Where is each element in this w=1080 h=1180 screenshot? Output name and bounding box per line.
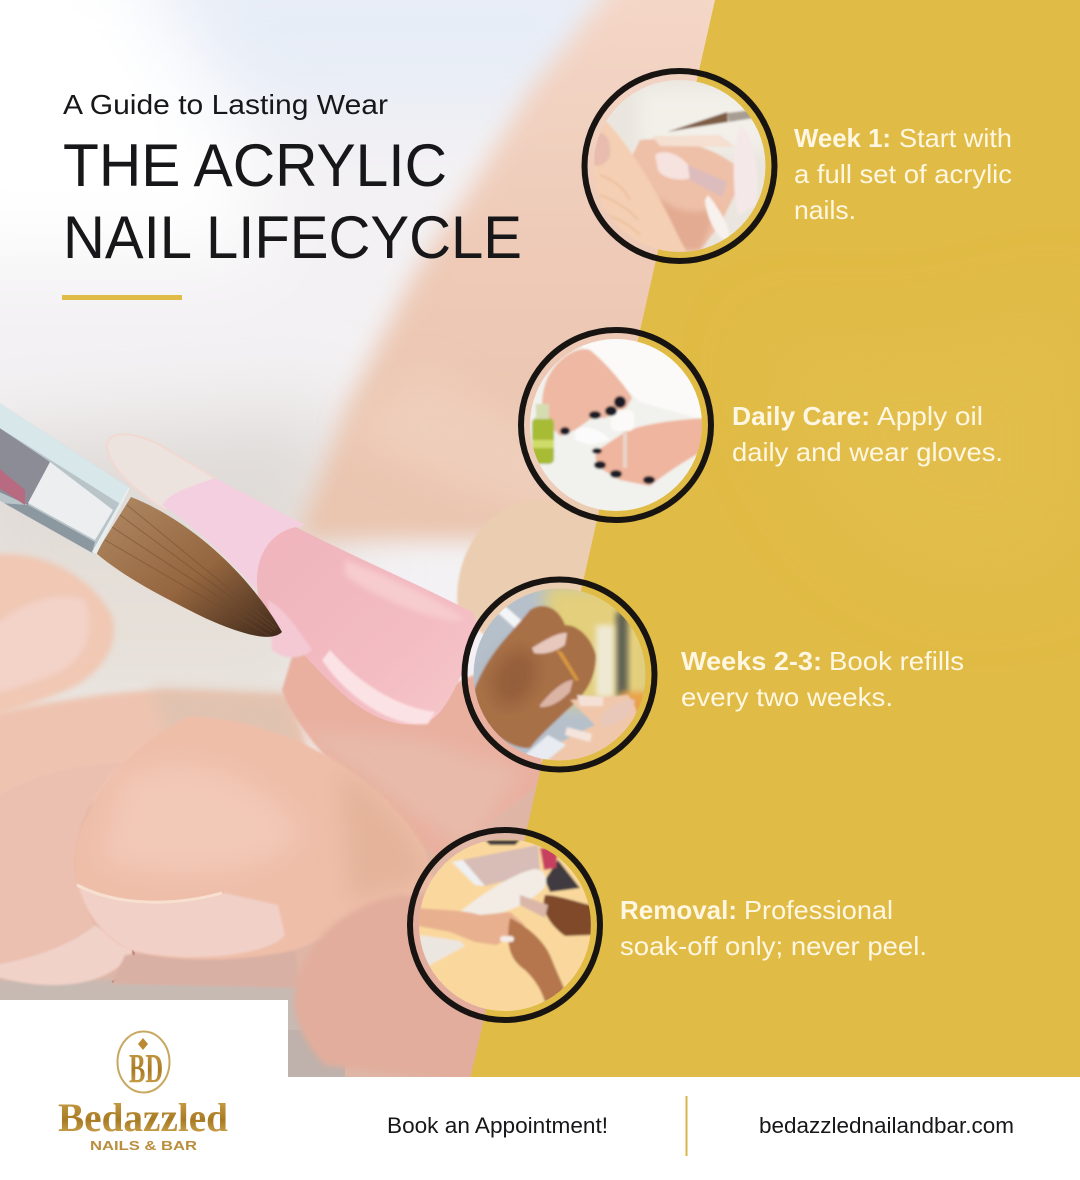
photo: nail tip and brush [590, 76, 770, 256]
logo emblem [118, 1032, 170, 1092]
gold diagonal panel [470, 0, 1080, 1080]
brush bristles [96, 497, 282, 637]
subtitle: A Guide to Lasting Wear [63, 89, 388, 120]
second finger [0, 690, 320, 810]
photo: professional soak-off [415, 835, 595, 1015]
photo: cuticle oil dropper [528, 336, 705, 516]
left lower finger [0, 806, 296, 988]
title [63, 132, 522, 271]
title underline [62, 295, 182, 300]
knuckle finger [74, 716, 435, 960]
ring [521, 330, 711, 520]
call to action: Book an Appointment! [387, 1113, 608, 1138]
caption: every two weeks. [681, 682, 893, 712]
caption: daily and wear gloves. [732, 437, 1003, 467]
title: NAIL LIFECYCLE [63, 204, 522, 271]
caption: nails. [794, 195, 856, 225]
lower background [0, 784, 537, 1077]
left finger with soft nail [0, 554, 114, 716]
nail finger skin [281, 654, 543, 855]
logo emblem: BD [129, 1045, 163, 1091]
background photo: acrylic nail application [0, 0, 715, 1077]
website: bedazzlednailandbar.com [759, 1113, 1014, 1138]
step 4: removal [410, 830, 927, 1020]
title: THE ACRYLIC [63, 132, 447, 199]
brush ferrule [0, 400, 132, 556]
caption: soak-off only; never peel. [620, 931, 927, 961]
ring [464, 580, 654, 770]
caption: Book refills [829, 646, 964, 676]
caption: Removal: [620, 895, 737, 925]
caption: Week 1: [794, 123, 891, 153]
caption: Start with [899, 123, 1012, 153]
step 3: weeks 2-3 [464, 580, 971, 770]
logo wordmark: Bedazzled [58, 1095, 228, 1140]
step 2: daily care [521, 330, 1003, 520]
heading block [62, 89, 522, 300]
logo: Bedazzled Nails & Bar [0, 1000, 288, 1180]
caption: Professional [744, 895, 893, 925]
pink acrylic nail [162, 478, 478, 724]
ring [410, 830, 600, 1020]
thumb behind the nail [456, 527, 595, 636]
footer divider [686, 1096, 688, 1156]
brush [0, 400, 282, 637]
logo tagline: NAILS & BAR [90, 1138, 198, 1153]
photo: technician hand refilling nail [474, 588, 646, 760]
wet acrylic bead [268, 600, 312, 658]
footer bar [0, 1077, 1080, 1180]
caption: Daily Care: [732, 401, 870, 431]
clear nail tip [107, 434, 215, 510]
ring [584, 71, 774, 261]
lower right finger [292, 896, 486, 1077]
caption: a full set of acrylic [794, 159, 1012, 189]
caption: Apply oil [877, 401, 983, 431]
caption: Weeks 2-3: [681, 646, 822, 676]
step 1: week 1 [584, 71, 1019, 261]
